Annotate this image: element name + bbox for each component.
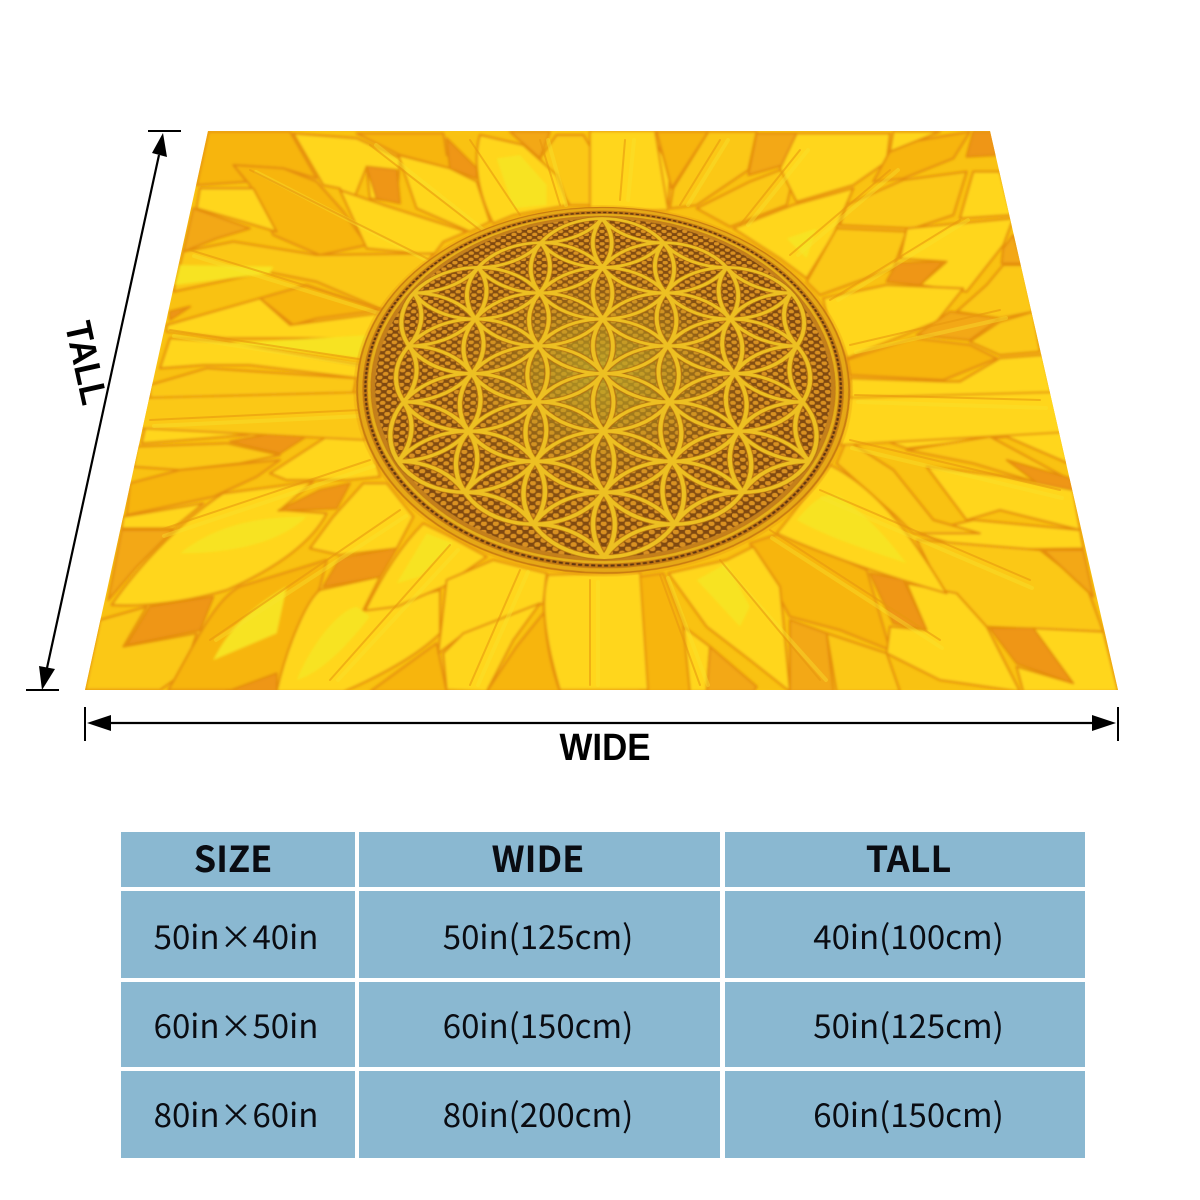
table row: 50in × 40in: 40in(100cm) [813,911,1004,959]
dimension annotations [26,130,1119,769]
petals: bottom right [640,423,1118,692]
label: TALL: TALL [57,318,115,408]
blanket petals [85,131,1118,690]
flower of life disc, projected to the blanket perspective [354,205,853,576]
table row: 80in × 60in: 80in(200cm) [443,1089,633,1137]
petals: centre top and bottom, side strips [135,131,1068,690]
table header row: TALL [866,830,951,882]
table header row: SIZE [194,830,272,882]
label: WIDE: WIDE [560,727,650,769]
petals: bottom left [85,420,560,692]
table row: 60in × 50in: 60in×50in [154,1000,318,1048]
table header row: WIDE [492,830,584,882]
table row: 60in × 50in: 50in(125cm) [813,1000,1004,1048]
arrow: wide dimension [85,707,1118,741]
table row: 80in × 60in: 60in(150cm) [813,1089,1004,1137]
table row: 60in × 50in [121,982,1085,1067]
table row: 80in × 60in [121,1071,1085,1158]
table row: 50in × 40in: 50in(125cm) [443,911,633,959]
table: size chart [121,830,1085,1158]
petals: top right [655,131,1050,398]
arrow: tall dimension [26,131,181,690]
petals: top left [150,132,600,405]
petal veins [150,140,1062,685]
table row: 80in × 60in: 80in×60in [154,1089,318,1137]
table row: 50in × 40in: 50in×40in [154,911,318,959]
table header row [121,830,1085,887]
table row: 60in × 50in: 60in(150cm) [443,1000,633,1048]
table row: 50in × 40in [121,891,1085,978]
